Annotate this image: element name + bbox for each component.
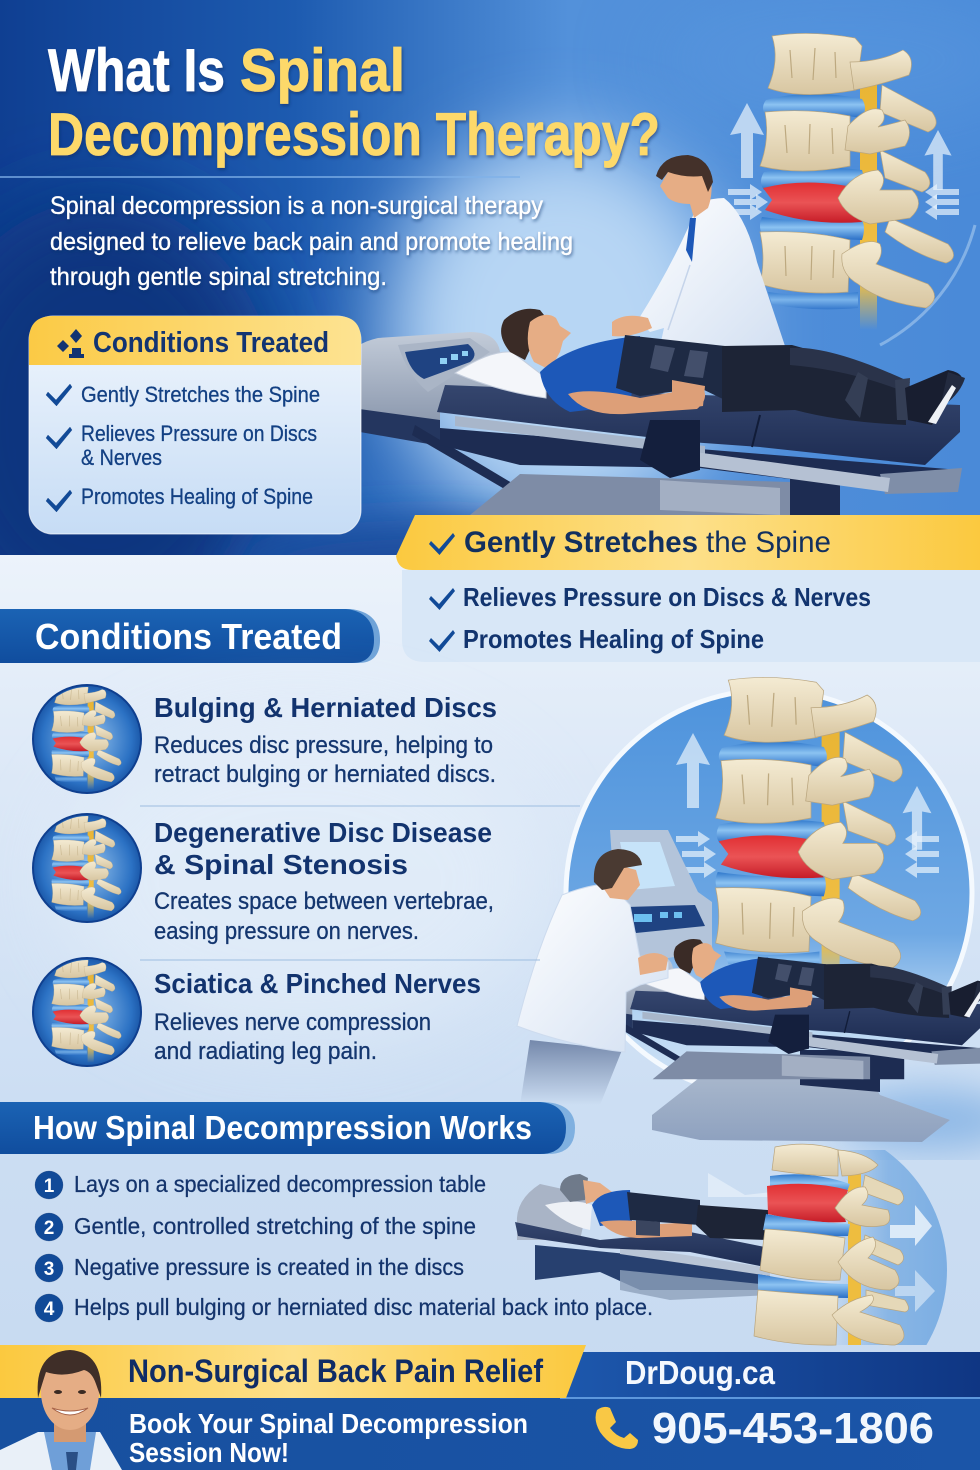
illustration: bottom table with patient: [515, 1174, 770, 1300]
portrait: doctor: [0, 1350, 122, 1470]
soft background shading: [60, 720, 540, 1040]
step 1: Lays on a specialized decompression table: [74, 1171, 486, 1197]
condition: bulging and herniated discs: retract bulging or herniated discs.: [154, 761, 496, 788]
panel: benefits list: [396, 515, 980, 662]
condition: sciatica and pinched nerves: Sciatica & Pinched Nerves: [154, 968, 481, 999]
condition: degenerative disc disease: & Spinal Stenosis: [154, 849, 408, 880]
illustration: hero spine with arrows: [728, 33, 959, 330]
panel: benefits list: Promotes Healing of Spine: [463, 624, 764, 654]
condition: sciatica and pinched nerves: Relieves nerve compression: [154, 1009, 431, 1036]
intro paragraph: through gentle spinal stretching.: [50, 263, 387, 291]
website: DrDoug.ca: [625, 1354, 776, 1391]
card header: Conditions Treated: [93, 327, 329, 359]
condition: degenerative disc disease: easing pressure on nerves.: [154, 918, 419, 945]
card header: [29, 316, 361, 365]
condition: bulging and herniated discs: Reduces disc pressure, helping to: [154, 732, 493, 759]
icon: spine circle 3: [33, 956, 141, 1066]
step 3: Negative pressure is created in the discs: [74, 1254, 464, 1280]
intro paragraph: designed to relieve back pain and promote healing: [50, 228, 573, 256]
card list: Promotes Healing of Spine: [81, 484, 313, 509]
call to action: [129, 1408, 528, 1468]
hero background: [0, 0, 980, 555]
step 2: 2: [44, 1218, 54, 1239]
phone number: 905-453-1806: [652, 1404, 934, 1453]
benefit banner: Gently Stretches: [464, 526, 698, 559]
step 3: 3: [44, 1259, 54, 1280]
benefit banner: the Spine: [706, 526, 831, 559]
icon: phone: [596, 1407, 638, 1449]
illustration: middle doctor: [517, 849, 668, 1105]
heading: conditions treated: [0, 609, 380, 663]
card list: Gently Stretches the Spine: [81, 382, 320, 407]
step 4: Helps pull bulging or herniated disc material back into place.: [74, 1294, 653, 1320]
illustration: middle monitor console: [610, 830, 712, 965]
heading: how it works: How Spinal Decompression Works: [33, 1109, 532, 1146]
conditions list: [33, 683, 580, 1066]
call to action: Book Your Spinal Decompression: [129, 1408, 528, 1439]
icon: spine circle 2: [33, 812, 141, 922]
illustration: middle table with patient: [626, 939, 980, 1142]
illustration: hero doctor: [612, 155, 785, 346]
title: Decompression Therapy?: [48, 101, 660, 168]
background: lower page: [0, 555, 980, 1470]
condition: bulging and herniated discs: Bulging & Herniated Discs: [154, 692, 497, 723]
title: Spinal: [240, 37, 405, 104]
benefit banner: [396, 515, 980, 570]
heading: how it works: [0, 1102, 575, 1154]
condition: sciatica and pinched nerves: and radiating leg pain.: [154, 1038, 377, 1065]
illustration: bottom spine: [754, 1144, 908, 1345]
panel: benefits list: Relieves Pressure on Discs & Nerves: [463, 582, 871, 612]
condition: bulging and herniated discs: [33, 683, 497, 793]
yellow banner: Non-Surgical Back Pain Relief: [128, 1353, 543, 1389]
intro paragraph: [50, 192, 573, 291]
yellow banner: [0, 1345, 586, 1398]
illustration: bottom spine circle: [708, 1150, 947, 1345]
heading: conditions treated: Conditions Treated: [35, 616, 342, 657]
intro paragraph: Spinal decompression is a non-surgical therapy: [50, 192, 543, 220]
step 1: 1: [44, 1176, 55, 1197]
call to action: Session Now!: [129, 1437, 289, 1468]
card list: Relieves Pressure on Discs: [81, 421, 317, 446]
card list: & Nerves: [81, 445, 162, 470]
step 2: Gentle, controlled stretching of the spine: [74, 1213, 476, 1239]
step 4: 4: [44, 1299, 55, 1320]
condition: degenerative disc disease: Creates space between vertebrae,: [154, 888, 494, 915]
title: [48, 37, 660, 168]
condition: sciatica and pinched nerves: [33, 956, 481, 1066]
icon: spine circle 1: [33, 683, 141, 793]
steps list: [35, 1171, 653, 1322]
footer: [0, 1345, 980, 1470]
condition: degenerative disc disease: Degenerative Disc Disease: [154, 817, 492, 848]
panel: conditions treated card: [29, 316, 361, 534]
condition: degenerative disc disease: [33, 812, 494, 945]
illustration: hero decompression table with patient: [350, 309, 965, 515]
illustration: middle spine circle: [566, 677, 980, 1150]
card list: [46, 382, 320, 512]
divider under title: [0, 176, 520, 178]
title: What Is: [48, 37, 225, 104]
